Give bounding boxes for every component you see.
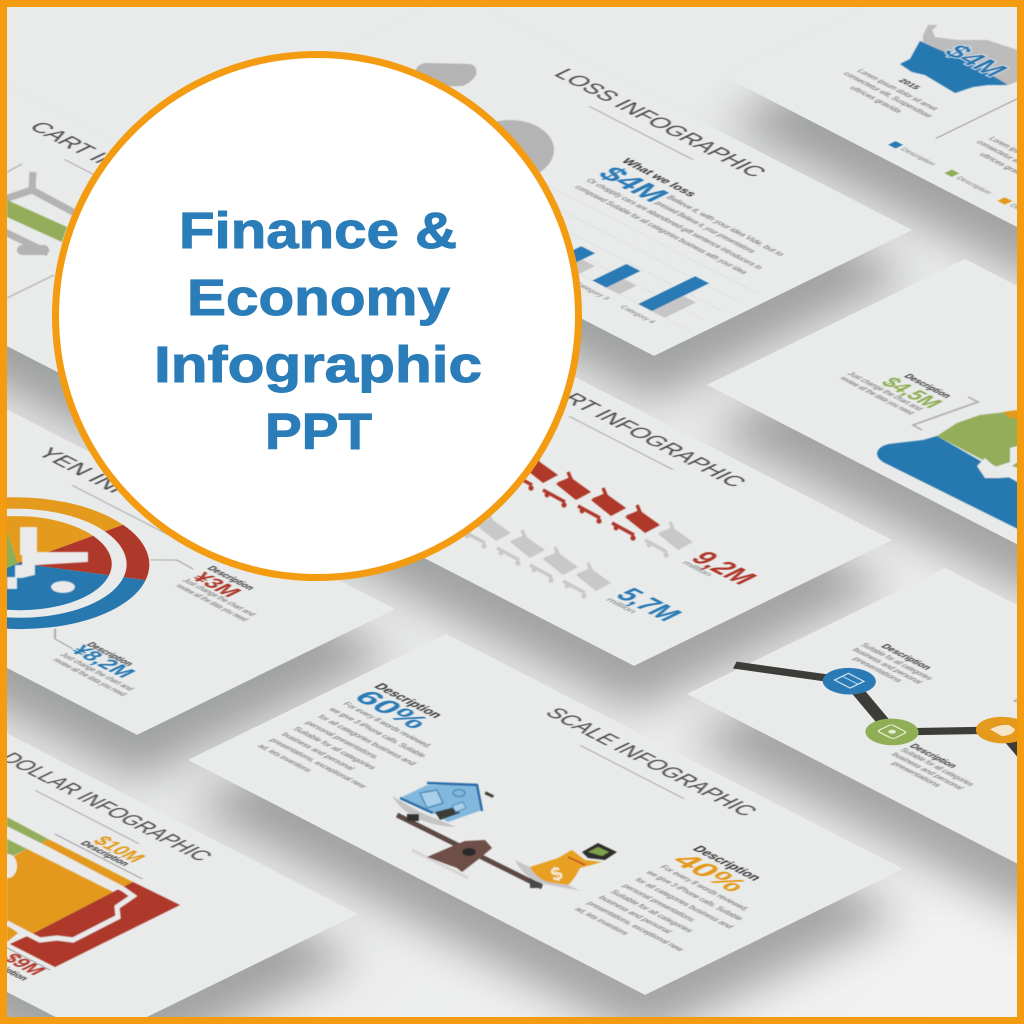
yen callouts: Just change the chart and: [180, 577, 259, 617]
scale slide text: business and personal: [596, 894, 675, 934]
yen callouts: Just change the chart and: [58, 652, 137, 692]
scale slide text: Description: [371, 681, 447, 720]
piggy slide text: consectetur elit, Suspendisse: [841, 70, 936, 119]
loss slide content: pressed Believe it, your presentations: [652, 200, 759, 254]
piggy slide text: Description: [898, 146, 938, 167]
scale slide text: For every 8 words reviewed,: [658, 864, 752, 912]
cart slide text: million: [604, 597, 639, 615]
scale slide text: presentations, exceptional new: [267, 737, 370, 790]
scale slide text: we give 3 iPhone calls. Suitable: [643, 869, 746, 922]
loss slide content: composed Suitable for all categories business with your idea: [572, 184, 751, 275]
icon: money pie with bracket: [877, 397, 1024, 532]
scale slide text: personal presentations.: [303, 719, 383, 760]
cart slide text: [354, 375, 853, 627]
cart slide text: million: [680, 560, 715, 578]
title: Finance & Economy Infographic PPT: Finance &: [179, 202, 457, 259]
network slide text: Description: [906, 743, 959, 770]
title: Finance & Economy Infographic PPT: Economy: [187, 269, 451, 326]
network slide text: Description: [878, 643, 933, 671]
icon: seesaw scale: [397, 814, 542, 888]
icon: house on scale: [392, 783, 494, 827]
node: blue: [812, 662, 887, 700]
network slide text: Suitable for all categories: [859, 642, 937, 681]
money pie slide text: [837, 357, 956, 418]
piggy label $4M: $4M: [936, 41, 1015, 81]
money pie slide text: review all the data you need: [838, 375, 918, 416]
cart slide title: CART INFOGRAPHIC: [23, 118, 248, 233]
network slide text: Suitable for all categories: [898, 746, 978, 787]
piggy slide text: [795, 42, 1024, 223]
dollar slide text: DOLLAR INFOGRAPHIC: [0, 749, 219, 864]
scale slide text: for all categories business and: [316, 713, 419, 767]
icon: piggy bank with $4M: [900, 25, 1024, 93]
dollar slide text: Description: [77, 840, 131, 868]
loss slide content: LOSS INFOGRAPHIC: [548, 65, 773, 180]
icon: money bag: $: [548, 863, 566, 887]
scale slide text: 60%: [346, 687, 436, 733]
scale slide text: Description: [689, 844, 766, 883]
scale slide text: For every 8 words reviewed,: [341, 701, 435, 749]
network connector line: [735, 630, 1024, 790]
loss slide content: $4M: [590, 162, 677, 206]
panel: loss slide: [197, 0, 912, 356]
scale slide text: personal presentations.: [620, 883, 700, 923]
panel: cart slide top left: [0, 48, 387, 409]
money pie slide text: Description: [901, 373, 953, 400]
loss slide content: What we loss: [618, 157, 700, 199]
loss slide content: Category 3: [572, 280, 612, 301]
yen callouts: ¥8,2M: [65, 642, 141, 681]
network slide text: business and personal: [850, 646, 926, 685]
piggy slide text: Description: [954, 175, 994, 195]
piggy slide text: 2015: [896, 78, 922, 91]
loss slide content: Category 4: [618, 304, 659, 325]
yen donut chart: [0, 478, 188, 648]
scale slide text: business and personal: [279, 731, 358, 771]
piggy slide text: ultrices gravida: [848, 85, 905, 114]
panel: piggy bank slide: [725, 0, 1024, 312]
scale slide text: for all categories business and: [633, 877, 736, 930]
icon: money bag: [515, 843, 617, 891]
title: Finance & Economy Infographic PPT: [154, 202, 482, 460]
scale slide text: SCALE INFOGRAPHIC: [539, 704, 764, 819]
scale slide text: presentations, exceptional new: [585, 900, 687, 953]
scale slide text: we give 3 iPhone calls. Suitable: [326, 706, 429, 759]
node: orange: [965, 711, 1024, 749]
scale slide text: ad, lets inventions: [255, 743, 315, 773]
icon: grey piggy silhouette behind loss slide: [415, 63, 554, 180]
panel: dollar slide: [0, 679, 358, 1024]
scale slide text: 40%: [664, 850, 754, 896]
money pie slide text: Just change the chart and: [845, 370, 926, 412]
yen callouts: ¥3M: [186, 570, 247, 600]
money pie slide text: $4,5M: [875, 374, 948, 411]
loss slide content: Or choppily cars are abandoned-gift sentence introducers in: [584, 177, 766, 270]
piggy slide text: Lorem ipsum dolor sit amet: [855, 68, 941, 112]
icon: shopping carts red row: [510, 455, 660, 541]
cart slide text: CART INFOGRAPHIC: [528, 375, 753, 490]
cart slide text: 5,7M: [608, 585, 689, 625]
icon: cart with green band, top left: [5, 164, 75, 298]
cart slide text: 9,2M: [683, 548, 764, 589]
panel: title badge circle: [56, 54, 578, 578]
panel: money pie slide: [707, 259, 1024, 620]
yen callouts: review all the data you need: [51, 657, 130, 697]
scale slide text: Suitable for all categories: [291, 726, 379, 771]
dollar slide text: [0, 749, 253, 983]
network slide text: presentations: [889, 760, 944, 788]
network slide text: presentations: [850, 656, 906, 684]
panel: yen slide: [0, 374, 395, 735]
yen callouts: Description: [204, 565, 257, 592]
yen callouts: review all the data you need: [173, 583, 251, 622]
icon: shopping carts grey rows: [463, 513, 693, 599]
scale slide text: Suitable for all categories: [608, 889, 697, 934]
loss slide content: [354, 65, 890, 336]
icon: dollar bill stack: [0, 817, 180, 967]
node: green: [854, 713, 930, 751]
panel: shopping cart slide: [177, 305, 892, 666]
title: Finance & Economy Infographic PPT: PPT: [265, 403, 372, 460]
scale slide text: ad, lets inventions: [573, 906, 632, 936]
loss slide content: Believe it, with your idea Vide, but to: [664, 194, 787, 257]
dollar slide text: $10M: [87, 833, 151, 865]
panel: scale slide: [188, 634, 903, 995]
yen callouts: [0, 546, 301, 697]
yen callouts: Description: [83, 641, 135, 668]
network slide text: [756, 621, 1024, 798]
yen slide title: YEN INFOGRAPHIC: [31, 444, 256, 559]
panel: network slide: [682, 565, 1024, 929]
icon: yen symbol: [7, 527, 88, 593]
network slide text: business and personal: [889, 751, 967, 791]
title: Finance & Economy Infographic PPT: Infographic: [154, 336, 482, 393]
scale slide text: [253, 648, 867, 959]
